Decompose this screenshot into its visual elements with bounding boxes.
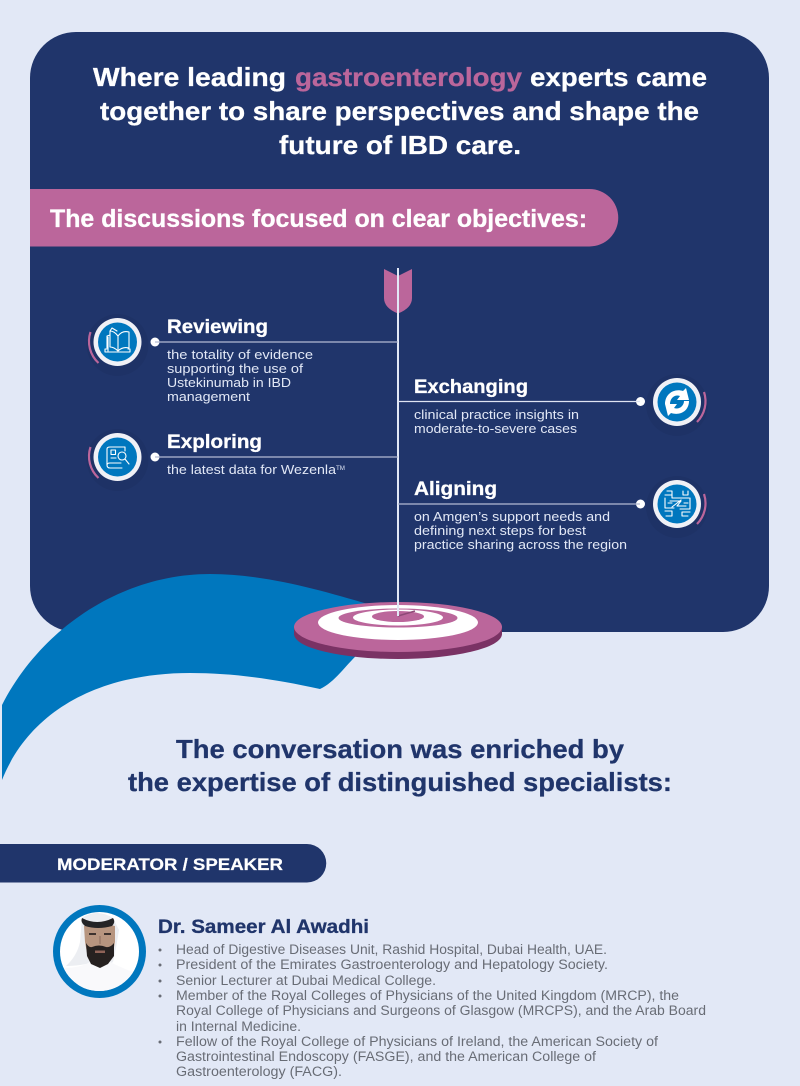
specialists heading: [128, 734, 672, 797]
objective: Exploring: [86, 429, 398, 491]
icon: exchange arrows: [665, 388, 689, 416]
objective: Reviewing: Ustekinumab in IBD: [167, 375, 291, 390]
speaker credentials: in Internal Medicine.: [176, 1019, 301, 1034]
objective: Reviewing: the totality of evidence: [167, 347, 313, 362]
title: gastroenterology: [295, 62, 523, 92]
title: Where leading: [93, 62, 286, 92]
objective: Aligning: [398, 476, 708, 552]
icon: joined hands: [665, 491, 690, 516]
speaker credentials: Member of the Royal Colleges of Physicians of the United Kingdom (MRCP), the: [176, 988, 679, 1003]
speaker credentials: Head of Digestive Diseases Unit, Rashid Hospital, Dubai Health, UAE.: [176, 942, 607, 957]
moderator banner: [0, 844, 326, 882]
title: experts came: [530, 62, 707, 92]
panel: objectives card: [30, 32, 769, 632]
objective: Exchanging: Exchanging: [414, 377, 528, 398]
target: [294, 600, 502, 659]
objective: Exchanging: clinical practice insights in: [414, 407, 579, 422]
icon: open books: [105, 328, 130, 352]
objective: Aligning: defining next steps for best: [414, 523, 586, 538]
speaker credentials: Fellow of the Royal College of Physicians of Ireland, the American Society of: [176, 1034, 658, 1049]
speaker credentials: [158, 942, 706, 1079]
specialists heading: the expertise of distinguished specialists:: [128, 767, 672, 797]
objective: Exploring: TM: [336, 466, 345, 472]
specialists heading: The conversation was enriched by: [176, 734, 625, 764]
objective: Reviewing: supporting the use of: [167, 361, 303, 376]
icon: book with magnifier: [107, 447, 129, 468]
headscarf: [66, 913, 119, 970]
title: [93, 62, 707, 160]
speaker credentials: President of the Emirates Gastroenterology and Hepatology Society.: [176, 957, 608, 972]
objective: Aligning: practice sharing across the region: [414, 537, 627, 552]
objective: Exploring: the latest data for Wezenla: [167, 462, 337, 477]
speaker credentials: Royal College of Physicians and Surgeons of Glasgow (MRCPS), and the Arab Board: [176, 1003, 706, 1018]
objective: Aligning: on Amgen’s support needs and: [414, 509, 610, 524]
speaker credentials: Gastroenterology (FACG).: [176, 1064, 342, 1079]
speaker portrait: [53, 905, 146, 998]
robe: [64, 962, 133, 991]
objective: Exchanging: moderate-to-severe cases: [414, 421, 578, 436]
speaker credentials: Senior Lecturer at Dubai Medical College.: [176, 973, 436, 988]
objective: Exchanging: [398, 374, 708, 436]
speaker credentials: Gastrointestinal Endoscopy (FASGE), and the American College of: [176, 1049, 596, 1064]
objective: Reviewing: Reviewing: [167, 317, 268, 338]
objectives banner: The discussions focused on clear objectives:: [50, 205, 587, 233]
timeline arrow: [384, 268, 412, 616]
moderator banner: MODERATOR / SPEAKER: [57, 855, 283, 874]
title: future of IBD care.: [279, 130, 521, 160]
headband: [81, 918, 114, 928]
objective: Reviewing: management: [167, 389, 250, 404]
face: [84, 924, 115, 966]
objective: Aligning: Aligning: [414, 479, 497, 500]
speaker name: Dr. Sameer Al Awadhi: [158, 917, 369, 938]
blue swoosh: [2, 574, 368, 780]
title: together to share perspectives and shape the: [100, 96, 699, 126]
beard: [86, 943, 114, 968]
objective: Reviewing: [86, 314, 398, 404]
objective: Exploring: Exploring: [167, 432, 262, 453]
objectives banner: [30, 189, 618, 246]
